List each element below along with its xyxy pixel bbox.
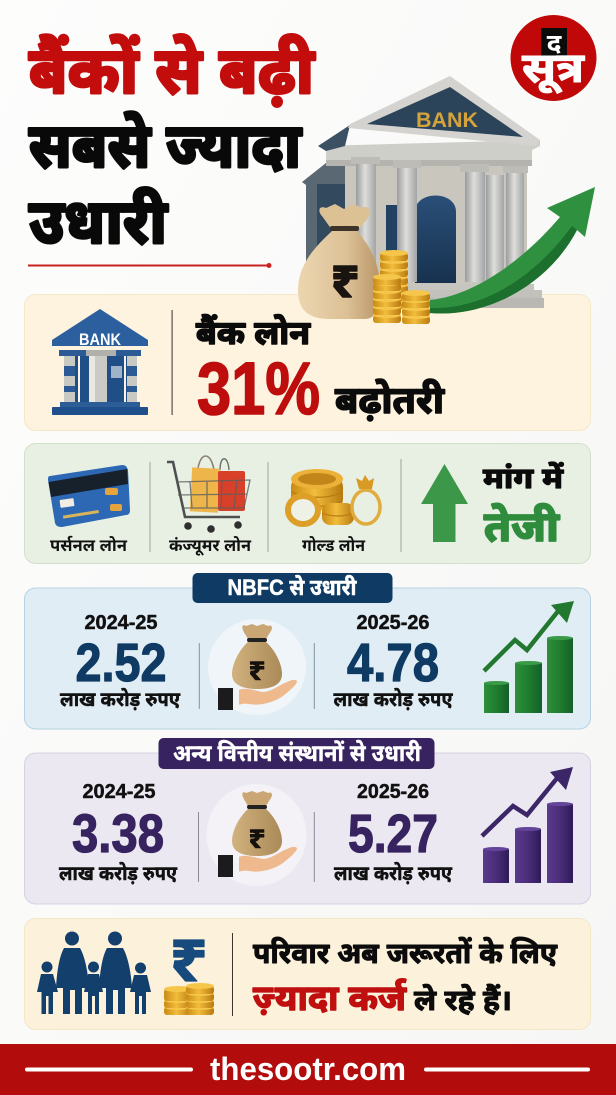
text: growth: बढ़ोतरी xyxy=(335,378,445,422)
steps xyxy=(378,284,534,290)
value 2.52: 2.52 xyxy=(76,633,166,693)
icon: money bag on hand xyxy=(208,619,306,715)
heading: bank loan: बैंक लोन xyxy=(196,314,311,351)
icon: rupee: ₹ xyxy=(170,921,207,995)
text: surge: तेजी xyxy=(484,503,560,550)
coin stack front xyxy=(373,274,401,323)
divider xyxy=(198,812,199,882)
value 3.38: 3.38 xyxy=(72,804,164,864)
divider xyxy=(400,459,402,552)
icon: shopping cart xyxy=(167,456,250,533)
back wall xyxy=(345,160,527,290)
coin stack short xyxy=(402,290,430,324)
text line 2: ज़्यादा कर्ज xyxy=(253,978,408,1018)
text line 1: परिवार अब जरूरतों के लिए xyxy=(253,936,558,970)
divider xyxy=(268,462,269,552)
pediment xyxy=(348,76,540,146)
icon: blue bank: BANK xyxy=(79,330,122,349)
chart: green growth bars xyxy=(484,601,574,713)
year 2024-25: 2024-25 xyxy=(82,781,156,803)
divider xyxy=(232,933,233,1016)
title line 3: उधारी xyxy=(29,187,169,257)
icon: money bag on hand: ₹ xyxy=(248,654,266,687)
logo: the sootr xyxy=(510,15,596,101)
text line 2 xyxy=(253,978,512,1018)
icon: coins xyxy=(164,983,214,1015)
label: BANK: BANK xyxy=(416,109,478,132)
footer xyxy=(0,1044,616,1095)
stat: 31%: 31% xyxy=(197,347,320,430)
icon: blue bank xyxy=(52,309,148,415)
label: gold loan: गोल्ड लोन xyxy=(302,535,366,555)
unit: लाख करोड़ रुपए xyxy=(59,861,178,885)
panel: loan types xyxy=(24,444,590,564)
panel: other financial institutions borrowing xyxy=(24,738,590,904)
divider xyxy=(314,812,315,882)
icon: money bag on hand xyxy=(206,784,306,886)
title line 2: सबसे ज्यादा xyxy=(29,110,303,181)
year 2025-26: 2025-26 xyxy=(357,781,429,803)
label: personal loan: पर्सनल लोन xyxy=(50,535,128,555)
year 2025-26: 2025-26 xyxy=(356,612,430,634)
icon: gold jewelry xyxy=(288,469,380,525)
unit: लाख करोड़ रुपए xyxy=(334,687,453,711)
columns xyxy=(356,164,376,290)
divider xyxy=(172,310,173,415)
divider xyxy=(150,462,151,552)
door xyxy=(415,196,456,283)
illustration: bank building with money bag and green arrow xyxy=(298,76,595,324)
text: demand: मांग में xyxy=(483,462,564,495)
coin stack tall xyxy=(380,250,408,309)
icon: family xyxy=(37,932,151,1014)
rupee on bag: ₹ xyxy=(331,252,359,308)
chart: purple growth bars xyxy=(482,767,573,883)
value 4.78: 4.78 xyxy=(347,633,439,693)
arrow: up xyxy=(421,464,468,542)
green arrow xyxy=(430,187,595,313)
entablature xyxy=(318,140,540,166)
title xyxy=(29,33,316,257)
unit: लाख करोड़ रुपए xyxy=(334,861,453,885)
unit: लाख करोड़ रुपए xyxy=(60,687,181,711)
heading pill xyxy=(192,573,392,603)
footer: thesootr.com xyxy=(210,1051,406,1087)
divider xyxy=(314,643,315,709)
divider xyxy=(199,643,200,709)
text line 2: ले रहे हैं। xyxy=(414,983,512,1017)
icon: credit card xyxy=(48,465,130,527)
year 2024-25: 2024-25 xyxy=(84,612,158,634)
title underline xyxy=(28,263,272,268)
value 5.27: 5.27 xyxy=(348,804,438,864)
heading pill: अन्य वित्तीय संस्थानों से उधारी xyxy=(173,740,422,766)
icon: money bag on hand: ₹ xyxy=(248,822,266,855)
title line 1: बैंकों से बढ़ी xyxy=(29,33,316,107)
panel: conclusion xyxy=(24,918,590,1030)
logo: the sootr: द xyxy=(547,28,562,58)
panel: bank loan xyxy=(24,294,590,430)
money bag xyxy=(319,204,370,230)
heading pill: NBFC से उधारी xyxy=(228,575,357,600)
logo: the sootr: सूत्र xyxy=(522,44,585,94)
panel: NBFC borrowing xyxy=(24,573,590,729)
building side wing xyxy=(302,163,360,290)
label: consumer loan: कंज्यूमर लोन xyxy=(169,535,252,557)
